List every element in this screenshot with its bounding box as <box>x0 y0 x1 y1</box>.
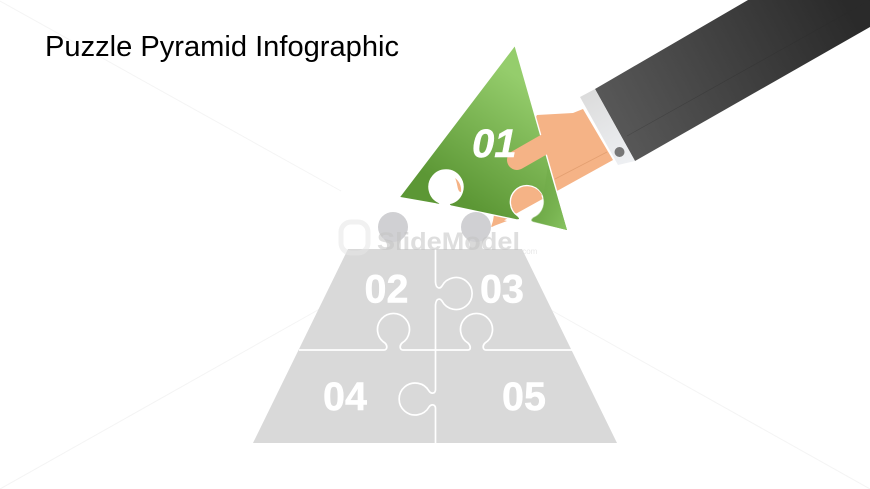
watermark wordmark: SlideModel <box>377 228 520 256</box>
hand crease <box>555 152 607 179</box>
piece highlight <box>531 165 567 230</box>
label 03: 03 <box>480 268 524 312</box>
green puzzle piece 01 <box>399 45 568 231</box>
piece body <box>399 45 568 231</box>
watermark logo <box>341 222 368 253</box>
shirt cuff <box>580 89 635 165</box>
title: Puzzle Pyramid Infographic <box>45 31 399 63</box>
hand palm <box>492 109 613 227</box>
hand holding the puzzle piece <box>492 109 613 227</box>
watermark <box>341 222 538 256</box>
watermark suffix: .com <box>520 247 538 256</box>
hand seen through socket <box>511 186 542 213</box>
label 05: 05 <box>502 375 546 419</box>
label 04: 04 <box>323 375 367 419</box>
pointing finger <box>517 144 545 160</box>
knob shading <box>378 212 491 242</box>
hand seen through left socket <box>455 178 461 192</box>
sleeve body <box>595 0 870 161</box>
cuff band <box>580 89 635 165</box>
puzzle joint lines <box>299 249 572 443</box>
hand sliver under piece <box>491 218 507 227</box>
pyramid body <box>253 238 617 443</box>
label 02: 02 <box>365 268 408 312</box>
label 01: 01 <box>472 122 516 166</box>
grey puzzle pyramid <box>253 212 617 443</box>
sleeve seam <box>627 0 870 136</box>
jacket sleeve <box>595 0 870 161</box>
cuff button <box>614 147 624 157</box>
